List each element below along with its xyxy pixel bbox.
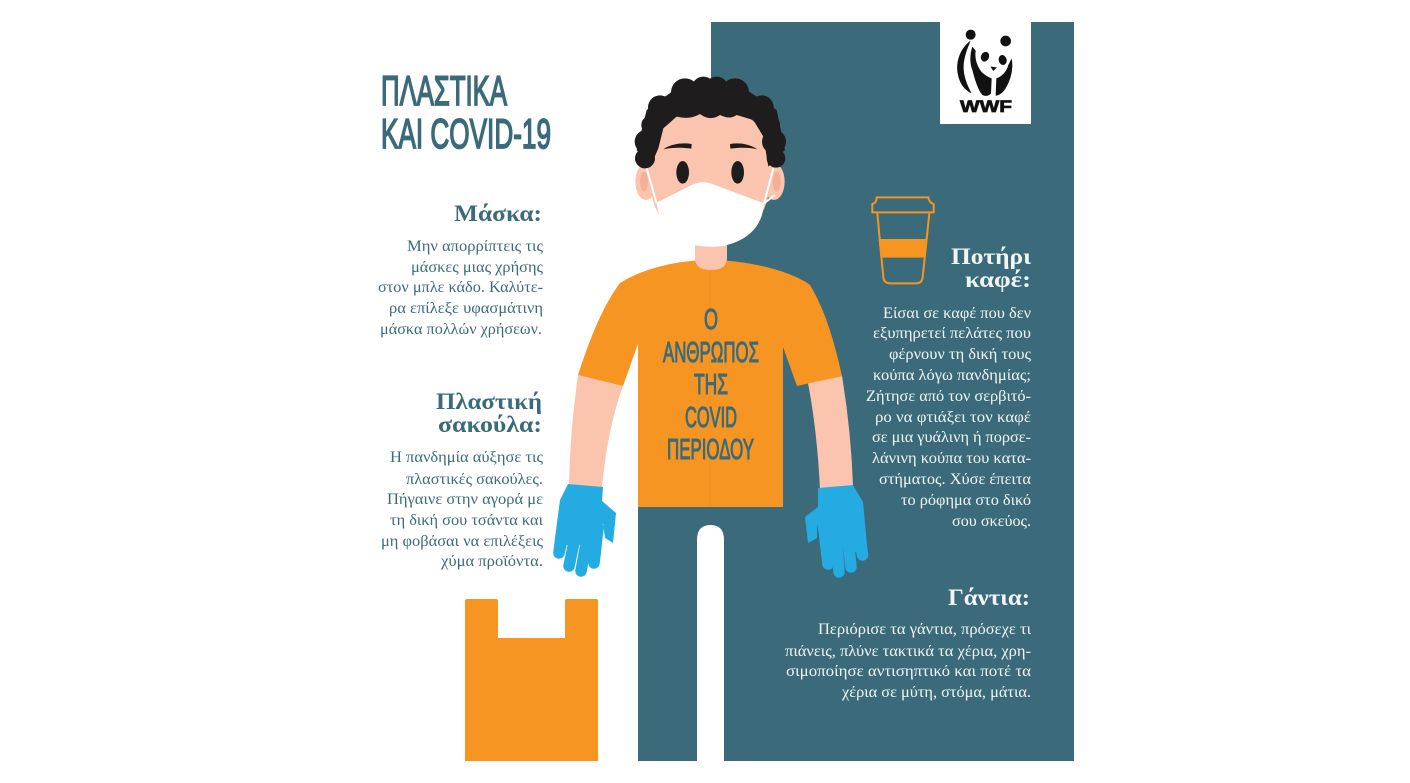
glove: right xyxy=(805,485,868,572)
title xyxy=(381,67,551,157)
person xyxy=(553,77,868,761)
arm: left xyxy=(569,375,623,488)
text block: coffee cup: στήματος. Χύσε έπειτα xyxy=(879,471,1031,488)
shirt text xyxy=(663,304,759,466)
heading: coffee cup: Ποτήρι xyxy=(951,244,1032,269)
hair xyxy=(635,77,786,168)
text block: mask: μάσκες μιας χρήσης xyxy=(411,259,543,276)
text block: mask: ρα επίλεξε υφασμάτινη xyxy=(389,300,543,317)
text block: coffee cup: το ρόφημα στο δικό xyxy=(901,492,1031,509)
text block: gloves: Περιόρισε τα γάντια, πρόσεχε τι xyxy=(818,621,1032,638)
eyebrows xyxy=(663,143,692,149)
text block: coffee cup: κούπα λόγω πανδημίας; xyxy=(873,367,1031,384)
shirt seam xyxy=(709,272,711,507)
eyes xyxy=(676,161,689,184)
text block: mask: μάσκα πολλών χρήσεων. xyxy=(380,321,542,338)
text block: plastic bag: Πήγαινε στην αγορά με xyxy=(387,491,544,508)
shirt text: COVID xyxy=(685,402,737,434)
heading: gloves: Γάντια: xyxy=(948,585,1030,610)
mask xyxy=(657,182,764,247)
text block: plastic bag xyxy=(381,449,544,570)
trousers xyxy=(638,507,724,761)
text block: mask xyxy=(378,238,543,338)
text block: coffee cup: σε μια γυάλινη ή πορσε- xyxy=(872,429,1031,446)
title: ΚΑΙ COVID-19 xyxy=(381,110,551,157)
text block: coffee cup: ρο να φτιάξει τον καφέ xyxy=(875,409,1032,426)
text block: plastic bag: Η πανδημία αύξησε τις xyxy=(390,449,543,466)
t-shirt xyxy=(578,260,842,507)
heading: mask: Μάσκα: xyxy=(454,201,542,226)
ears xyxy=(635,163,657,200)
gap between legs xyxy=(697,525,724,761)
heading: coffee cup: καφέ: xyxy=(965,267,1031,292)
logo: WWF panda xyxy=(940,22,1031,124)
text block: mask: Μην απορρίπτεις τις xyxy=(407,238,543,255)
face xyxy=(651,107,769,245)
text block: mask: στον μπλε κάδο. Καλύτε- xyxy=(378,279,543,296)
glove: left xyxy=(553,484,616,571)
text block: plastic bag: χύμα προϊόντα. xyxy=(440,553,543,570)
head xyxy=(635,77,786,247)
title: ΠΛΑΣΤΙΚΑ xyxy=(381,67,507,114)
text block: gloves: σιμοποίησε αντισηπτικό και ποτέ τα xyxy=(786,663,1031,680)
icon: plastic bag xyxy=(465,599,598,761)
text block: gloves: πιάνεις, πλύνε τακτικά τα χέρια, χρη- xyxy=(785,643,1031,660)
icon: coffee cup xyxy=(872,197,934,283)
text block: coffee cup: λάνινη κούπα του κατα- xyxy=(872,450,1031,467)
mask straps xyxy=(647,168,775,218)
text block: plastic bag: πλαστικές σακούλες. xyxy=(406,471,543,488)
panel: teal background xyxy=(711,22,1074,761)
text block: coffee cup xyxy=(866,305,1032,530)
arm: right xyxy=(808,376,853,489)
text block: coffee cup: Ζήτησε από τον σερβιτό- xyxy=(866,388,1031,405)
shirt text: ΠΕΡΙΟΔΟΥ xyxy=(667,434,754,466)
shirt text: ΤΗΣ xyxy=(694,369,728,401)
heading: coffee cup xyxy=(951,244,1032,292)
text block: plastic bag: μη φοβάσαι να επιλέξεις xyxy=(381,533,543,550)
text block: gloves xyxy=(785,621,1032,701)
shirt text: Ο xyxy=(704,304,718,336)
text block: coffee cup: εξυπηρετεί πελάτες που xyxy=(873,325,1031,342)
heading: plastic bag: Πλαστική xyxy=(436,389,542,414)
heading: plastic bag xyxy=(436,389,542,437)
text block: plastic bag: τη δική σου τσάντα και xyxy=(390,512,544,529)
logo: WWF panda: WWF xyxy=(960,98,1012,116)
heading: plastic bag: σακούλα: xyxy=(438,412,542,437)
text block: coffee cup: φέρνουν τη δική τους xyxy=(889,346,1031,363)
text block: coffee cup: σου σκεύος. xyxy=(952,513,1031,530)
text block: gloves: χέρια σε μύτη, στόμα, μάτια. xyxy=(841,684,1031,701)
shirt text: ΑΝΘΡΩΠΟΣ xyxy=(663,337,759,369)
text block: coffee cup: Είσαι σε καφέ που δεν xyxy=(883,305,1031,322)
neck xyxy=(695,235,727,270)
